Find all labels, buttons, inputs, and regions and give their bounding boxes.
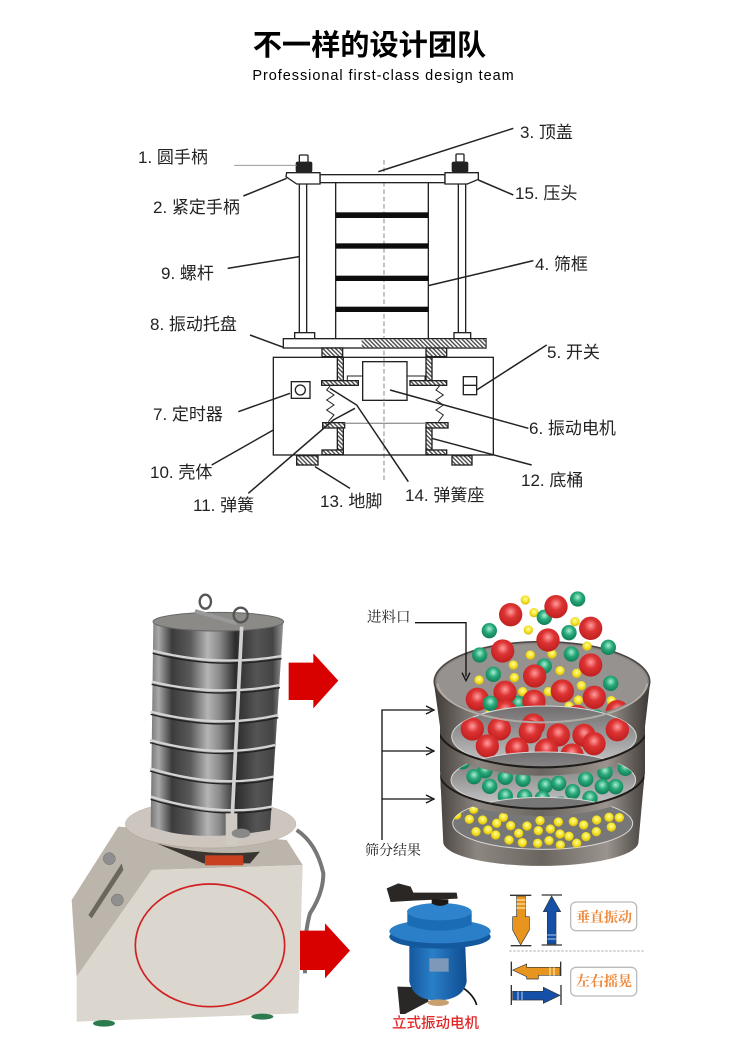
top-tier particles — [466, 650, 626, 712]
part labels: 1. 圆手柄 — [138, 148, 208, 167]
vertical vibration box — [571, 902, 637, 931]
part labels: 7. 定时器 — [153, 405, 223, 424]
red arrow to sieve — [289, 653, 338, 708]
part labels: 5. 开关 — [547, 343, 600, 362]
handle — [387, 883, 458, 902]
horizontal shake box — [571, 967, 637, 996]
feed arrow — [415, 623, 470, 681]
part labels: 11. 弹簧 — [193, 496, 254, 515]
top cap — [407, 912, 472, 931]
housing — [273, 357, 493, 455]
centre line — [382, 160, 385, 480]
threaded rods — [295, 184, 471, 339]
orange down arrow — [510, 895, 531, 946]
part labels: 3. 顶盖 — [520, 123, 573, 142]
tier two window — [450, 752, 636, 802]
sieve body — [434, 683, 650, 866]
falling particles — [472, 591, 616, 677]
label: side to side shake: 左右摇晃 — [576, 973, 632, 990]
dotted divider — [509, 949, 645, 953]
clamp rod and handles — [195, 595, 250, 845]
part labels: 12. 底桶 — [521, 471, 583, 490]
foot — [397, 987, 428, 1014]
sieve with particles — [382, 591, 650, 866]
machine photo — [72, 595, 350, 1027]
result bracket arrows — [382, 706, 434, 840]
top rim interior — [434, 642, 650, 722]
flange — [389, 925, 491, 949]
red ellipse — [135, 884, 285, 1007]
cable — [458, 985, 477, 1005]
part labels: 2. 紧定手柄 — [153, 198, 240, 217]
red arrow to motor — [300, 923, 350, 978]
label: feed inlet: 进料口 — [367, 609, 410, 626]
blue up arrow — [542, 895, 562, 945]
label: vertical vibration motor: 立式振动电机 — [392, 1014, 479, 1032]
part labels: 9. 螺杆 — [161, 264, 214, 283]
title: 不一样的设计团队 — [253, 30, 486, 62]
part labels: 8. 振动托盘 — [150, 315, 237, 334]
motor body — [409, 938, 467, 1001]
part labels: 15. 压头 — [515, 184, 577, 203]
turntable disc — [125, 800, 296, 848]
under-disc shadow — [157, 843, 260, 863]
feet — [93, 1014, 273, 1027]
part labels: 13. 地脚 — [320, 492, 382, 511]
label: screening result: 筛分结果 — [365, 842, 421, 859]
vibration tray — [283, 339, 486, 357]
top cover and clamp heads — [286, 154, 478, 184]
part labels: 4. 筛框 — [535, 255, 588, 274]
control panel — [88, 853, 123, 918]
red motor window — [205, 855, 243, 865]
structure diagram — [138, 123, 616, 515]
power cable — [297, 830, 323, 973]
sieve stack — [150, 612, 284, 836]
part labels — [138, 123, 616, 515]
inner parts — [297, 357, 472, 465]
base top sloped panel — [72, 827, 303, 977]
vibration motor — [387, 883, 645, 1014]
timer and switch — [291, 377, 477, 398]
leader lines — [212, 128, 547, 493]
base front face — [77, 865, 303, 1022]
tier rings — [437, 682, 648, 812]
subtitle: Professional first-class design team — [252, 68, 515, 84]
label: vertical vibration: 垂直振动 — [576, 909, 632, 926]
blue right arrow — [511, 985, 561, 1005]
part labels: 6. 振动电机 — [529, 419, 616, 438]
orange left arrow — [511, 962, 561, 979]
sieve frames — [336, 183, 428, 339]
part labels: 10. 壳体 — [150, 463, 212, 482]
part labels: 14. 弹簧座 — [405, 486, 484, 505]
tier one window — [451, 706, 637, 759]
tier three window — [452, 797, 633, 850]
nameplate — [429, 958, 449, 972]
